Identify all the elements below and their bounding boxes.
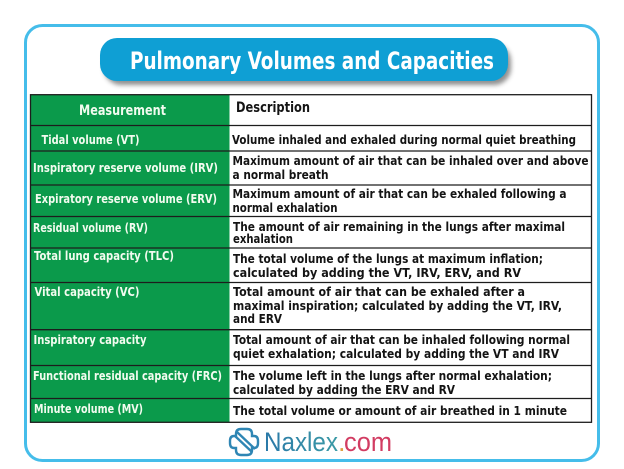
brand name: Naxlex xyxy=(264,427,338,457)
row: total lung capacity: calculated by adding the VT, IRV, ERV, and RV xyxy=(233,266,522,280)
row: tidal volume xyxy=(42,133,576,147)
row: residual volume: exhalation xyxy=(233,232,293,246)
row: vital capacity xyxy=(34,285,562,326)
row: tidal volume: Volume inhaled and exhaled during normal quiet breathing xyxy=(232,133,576,147)
description column background xyxy=(230,94,592,422)
brand name: . xyxy=(338,427,346,457)
row: vital capacity: and ERV xyxy=(233,312,283,326)
icon: Naxlex cross xyxy=(230,429,258,455)
row: inspiratory reserve volume: a normal breath xyxy=(232,168,328,182)
row: residual volume xyxy=(33,220,565,246)
title banner xyxy=(100,38,511,85)
row: tidal volume: Tidal volume (VT) xyxy=(42,133,140,147)
row: inspiratory capacity: quiet exhalation; calculated by adding the VT and IRV xyxy=(233,347,560,361)
row: residual volume: The amount of air remaining in the lungs after maximal xyxy=(233,220,565,234)
column headers: Description xyxy=(236,100,310,116)
row: inspiratory capacity: Inspiratory capacity xyxy=(34,333,147,347)
row: expiratory reserve volume: Expiratory reserve volume (ERV) xyxy=(35,192,217,206)
row: vital capacity: maximal inspiration; calculated by adding the VT, IRV, xyxy=(233,299,562,313)
row: functional residual capacity: The volume left in the lungs after normal exhalation; xyxy=(233,369,552,383)
logo xyxy=(230,427,392,457)
row: vital capacity: Vital capacity (VC) xyxy=(34,285,140,299)
table xyxy=(30,94,592,422)
row: expiratory reserve volume: normal exhalation xyxy=(232,201,338,215)
row: minute volume: The total volume or amount of air breathed in 1 minute xyxy=(233,404,567,418)
brand name: com xyxy=(344,427,392,457)
row: expiratory reserve volume xyxy=(35,187,566,215)
column headers: Measurement xyxy=(79,103,166,119)
row: residual volume: Residual volume (RV) xyxy=(33,221,148,235)
row: functional residual capacity xyxy=(33,369,552,397)
row: vital capacity: Total amount of air that can be exhaled after a xyxy=(233,285,525,299)
row: total lung capacity: Total lung capacity (TLC) xyxy=(34,249,174,263)
row: expiratory reserve volume: Maximum amount of air that can be exhaled following a xyxy=(232,187,566,201)
brand name xyxy=(264,427,392,457)
row: inspiratory reserve volume: Inspiratory reserve volume (IRV) xyxy=(33,161,218,175)
measurement column background xyxy=(30,94,230,422)
row: total lung capacity: The total volume of the lungs at maximum inflation; xyxy=(233,252,543,266)
row: total lung capacity xyxy=(34,249,543,280)
row: functional residual capacity: Functional residual capacity (FRC) xyxy=(33,369,222,383)
title: Pulmonary Volumes and Capacities xyxy=(130,47,494,75)
row: inspiratory capacity xyxy=(34,333,570,361)
row: inspiratory capacity: Total amount of air that can be inhaled following normal xyxy=(233,333,570,347)
row: functional residual capacity: calculated by adding the ERV and RV xyxy=(233,383,456,397)
column headers xyxy=(79,100,310,119)
row: minute volume xyxy=(34,402,567,418)
row: inspiratory reserve volume xyxy=(33,154,588,182)
row: minute volume: Minute volume (MV) xyxy=(34,402,143,416)
